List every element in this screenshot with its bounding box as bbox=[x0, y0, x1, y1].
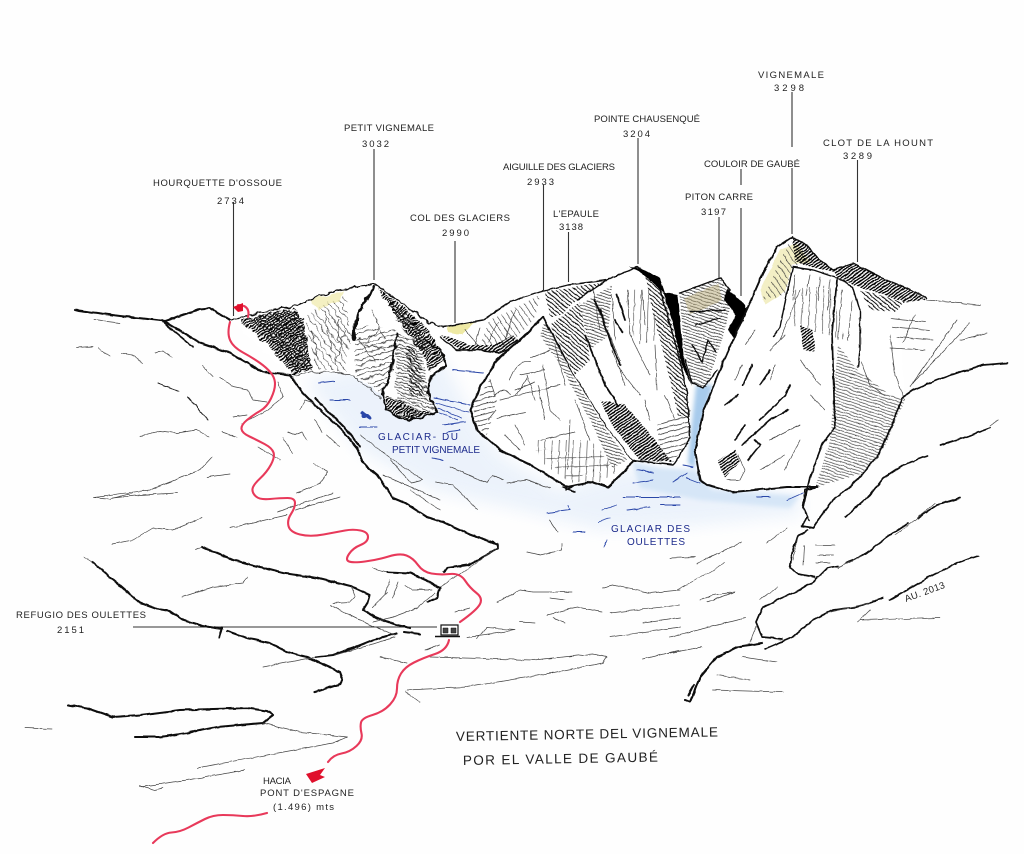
red arrow towards Pont d'Espagne bbox=[306, 768, 325, 783]
label: Hacia Pont d'Espagne bbox=[260, 776, 354, 813]
label: Piton Carre: PITON CARRE bbox=[685, 192, 753, 203]
title bbox=[456, 724, 718, 768]
label: Hacia Pont d'Espagne: PONT D'ESPAGNE bbox=[260, 788, 354, 799]
label: Hourquette d'Ossoue bbox=[153, 178, 282, 207]
label: Glaciar du Petit Vignemale: GLACIAR- DU bbox=[378, 432, 458, 443]
label: Col des Glaciers bbox=[410, 213, 510, 239]
glacier blue wash bbox=[305, 355, 800, 530]
label: Vignemale bbox=[758, 70, 824, 94]
main ridge lines bbox=[25, 308, 498, 790]
label: Hourquette d'Ossoue: HOURQUETTE D'OSSOUE bbox=[153, 178, 282, 189]
label: L'Epaule: 3138 bbox=[559, 222, 583, 233]
label: Vignemale: VIGNEMALE bbox=[758, 70, 824, 81]
leader lines to peaks bbox=[133, 92, 858, 627]
label: Refugio des Oulettes: 2151 bbox=[57, 625, 84, 636]
label: Couloir de Gaube: COULOIR DE GAUBÉ bbox=[704, 159, 800, 170]
mountain: central front buttress bbox=[470, 317, 633, 492]
icon: Refugio hut bbox=[435, 625, 460, 636]
label: Piton Carre bbox=[685, 192, 753, 218]
label: Hourquette d'Ossoue: 2734 bbox=[217, 196, 244, 207]
label: Refugio des Oulettes: REFUGIO DES OULETTES bbox=[16, 610, 146, 621]
thin terrain strokes bbox=[77, 320, 940, 702]
label: Petit Vignemale: PETIT VIGNEMALE bbox=[344, 123, 434, 134]
mountain: Col des Glaciers lump and Aiguille ridge bbox=[440, 280, 607, 353]
label: Glaciar du Petit Vignemale: PETIT VIGNEMALE bbox=[392, 445, 480, 456]
label: Col des Glaciers: 2990 bbox=[442, 228, 469, 239]
peak labels bbox=[16, 70, 946, 813]
label: Aiguille des Glaciers: 2933 bbox=[527, 177, 554, 188]
title: VERTIENTE NORTE DEL VIGNEMALE bbox=[456, 724, 718, 744]
label: Pointe Chausenque bbox=[594, 114, 700, 140]
label: Glaciar des Oulettes bbox=[611, 524, 690, 548]
label: Pointe Chausenque: POINTE CHAUSENQUÉ bbox=[594, 114, 700, 125]
label: Aiguille des Glaciers: AIGUILLE DES GLACIERS bbox=[503, 162, 615, 173]
label: L'Epaule: L'EPAULE bbox=[553, 209, 599, 220]
label: Piton Carre: 3197 bbox=[701, 207, 726, 218]
label: Aiguille des Glaciers bbox=[503, 162, 615, 188]
label: Clot de la Hount bbox=[823, 138, 933, 162]
label: Petit Vignemale bbox=[344, 123, 434, 150]
hillside ink lines bbox=[25, 308, 1007, 790]
right side ridge lines bbox=[685, 363, 1007, 702]
label: Hacia Pont d'Espagne: HACIA bbox=[263, 776, 292, 787]
label: Glaciar du Petit Vignemale bbox=[378, 432, 480, 456]
label: Petit Vignemale: 3032 bbox=[362, 139, 389, 150]
red arrow at the pass bbox=[233, 303, 243, 312]
blue glacier pen strokes bbox=[318, 370, 803, 547]
label: Glaciar des Oulettes: GLACIAR DES bbox=[611, 524, 690, 535]
label: Hacia Pont d'Espagne: (1.496) mts bbox=[273, 802, 334, 813]
label: Refugio des Oulettes bbox=[16, 610, 146, 636]
label: Clot de la Hount: CLOT DE LA HOUNT bbox=[823, 138, 933, 149]
mountain: Vignemale and Clot de la Hount bbox=[695, 237, 987, 520]
label: Clot de la Hount: 3289 bbox=[843, 151, 872, 162]
title: POR EL VALLE DE GAUBÉ bbox=[463, 750, 658, 768]
glacier labels bbox=[378, 432, 690, 548]
label: L'Epaule bbox=[553, 209, 599, 233]
label: Vignemale: 3298 bbox=[774, 83, 804, 94]
mountain: Piton Carre bbox=[663, 278, 749, 388]
label: Col des Glaciers: COL DES GLACIERS bbox=[410, 213, 510, 224]
label: Pointe Chausenque: 3204 bbox=[623, 129, 650, 140]
mountain: Pointe Chausenque bbox=[550, 266, 690, 465]
mountain: Petit Vignemale bbox=[230, 284, 448, 420]
red route up to Hourquette d'Ossoue bbox=[153, 305, 481, 843]
label: Glaciar des Oulettes: OULETTES bbox=[627, 537, 685, 548]
label: signature: AU. 2013 bbox=[903, 580, 946, 605]
